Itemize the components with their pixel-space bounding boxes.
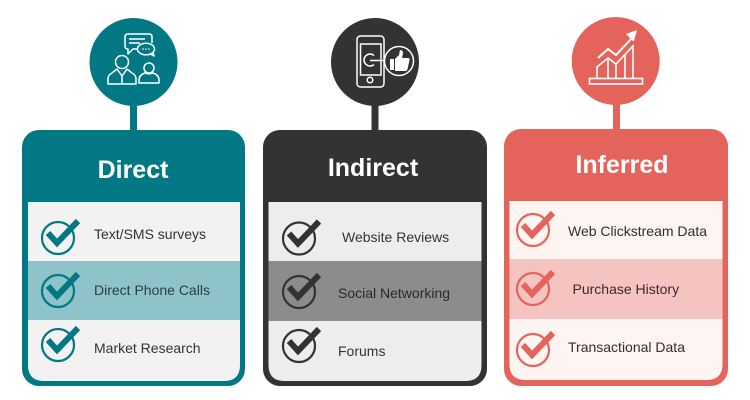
item: website reviews [283,222,449,254]
panel: inferred [504,17,728,386]
highlighted row [268,261,482,321]
panel: direct [22,18,245,386]
card [22,130,245,386]
icon: phone with thumbs up [331,18,419,106]
item: market research [42,328,201,361]
item: transactional data [517,333,685,366]
highlighted row [510,259,722,319]
highlighted row [28,261,240,320]
item: phone calls [42,274,210,307]
icon: people talking [90,18,178,106]
heading: Inferred [575,151,669,179]
stem [372,100,378,135]
item: web clickstream [517,213,707,246]
item: web clickstream: Web Clickstream Data [568,223,707,239]
list body [28,202,240,381]
item: market research: Market Research [94,340,201,356]
item: purchase history: Purchase History [572,281,679,297]
item: forums: Forums [338,343,385,359]
list body [268,202,482,381]
heading: Direct [98,156,169,184]
card [504,129,728,386]
item: social networking: Social Networking [338,285,450,301]
card [263,130,487,386]
panel: indirect [263,18,487,386]
item: text/sms [42,221,206,254]
list body [510,201,722,380]
item: forums [283,329,385,362]
item: phone calls: Direct Phone Calls [94,282,210,298]
item: transactional data: Transactional Data [568,339,685,355]
item: text/sms: Text/SMS surveys [94,226,206,242]
heading: Indirect [328,154,419,182]
item: social networking [283,275,450,308]
stem [613,100,620,134]
icon: growth chart [572,17,660,105]
item: website reviews: Website Reviews [342,229,449,245]
item: purchase history [517,272,679,305]
stem [130,100,137,135]
